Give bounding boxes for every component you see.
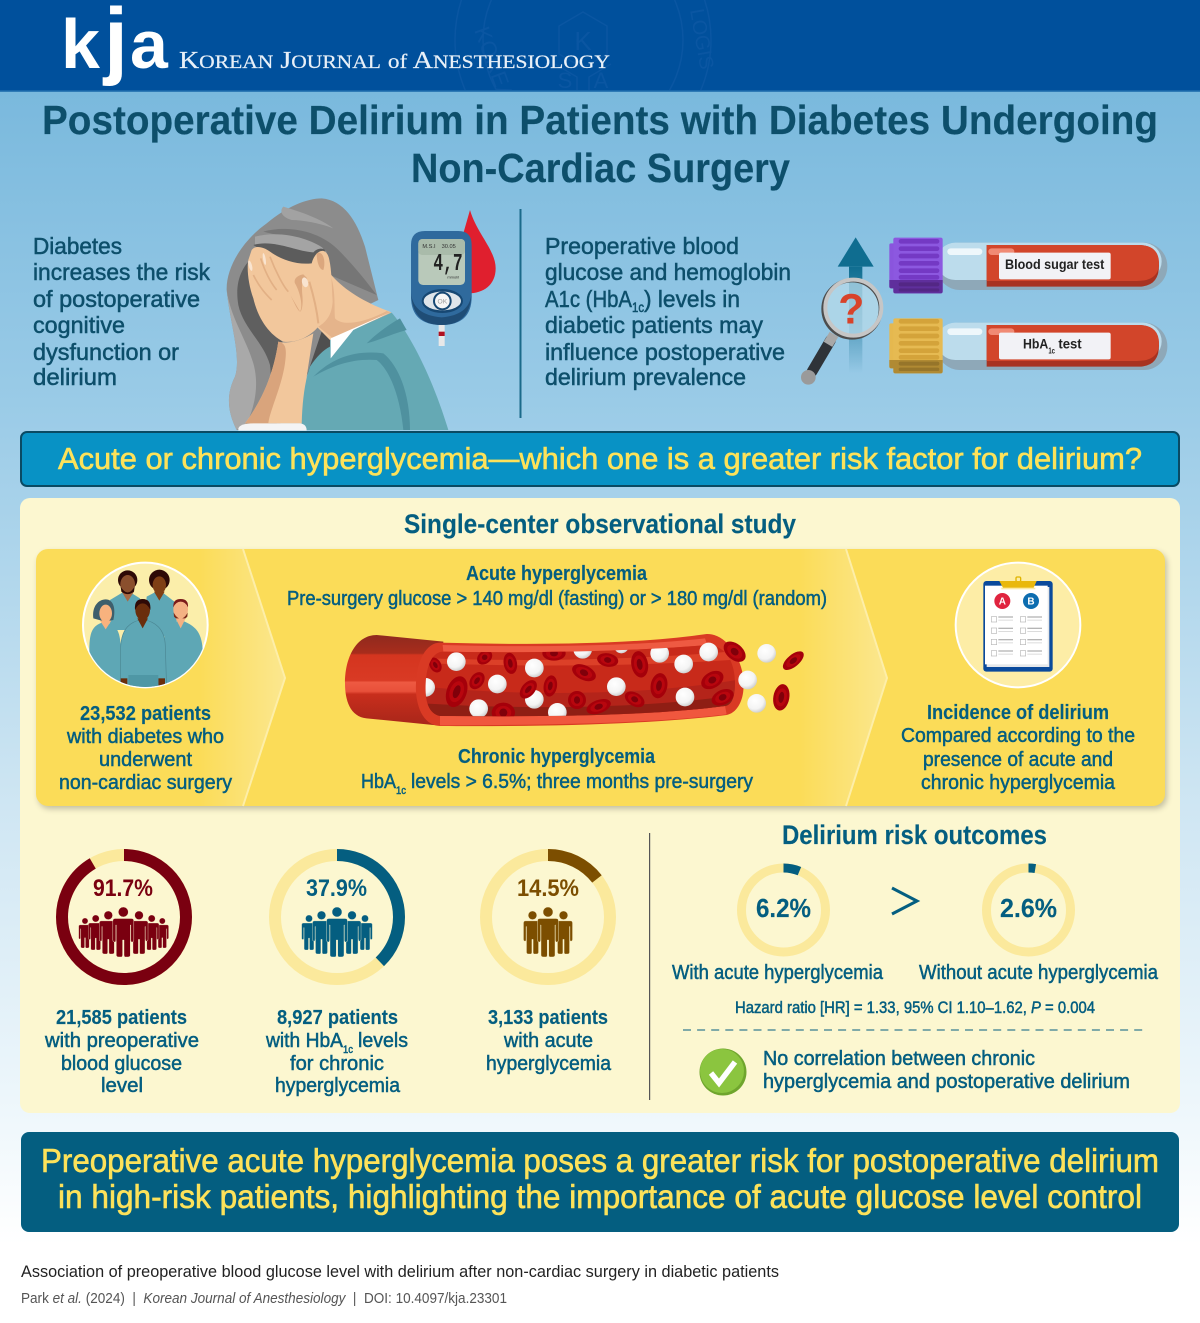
header band: KOREA xyxy=(469,23,519,104)
illustration: glucose meter with blood drop: M.S.I xyxy=(422,244,436,250)
header band: A xyxy=(594,68,609,93)
text: chronic hyperglycemia definition xyxy=(361,746,753,797)
conclusion banner xyxy=(21,1132,1179,1232)
chart: outcome donut 2.6% xyxy=(986,868,1070,952)
text: preoperative glucose: A1c (HbA xyxy=(545,286,633,312)
text: patients enrolled: non-cardiac surgery xyxy=(59,772,232,794)
chart: outcome donut 6.2% xyxy=(742,868,826,952)
illustration: blood sugar test tube xyxy=(889,238,1167,293)
text: diabetes risk: of postoperative xyxy=(33,286,200,312)
text: 21,585 patients: level xyxy=(101,1075,143,1097)
text: preoperative glucose: delirium prevalence xyxy=(545,364,746,390)
illustration: glucose meter with blood drop: 30.05 xyxy=(442,244,456,250)
journal logo: k xyxy=(61,5,100,83)
conclusion banner: in high-risk patients, highlighting the importance of acute glucose level control xyxy=(58,1178,1142,1215)
text: acute hyperglycemia definition xyxy=(287,563,827,610)
text: patients enrolled: 23,532 patients xyxy=(80,703,211,725)
text: diabetes risk: cognitive xyxy=(33,312,125,338)
journal name: KOREAN JOURNAL of ANESTHESIOLOGY xyxy=(179,48,610,74)
text: preoperative glucose: 1c xyxy=(632,299,644,315)
magnifier xyxy=(801,280,881,385)
text: chronic hyperglycemia definition: Chronic hyperglycemia xyxy=(458,746,656,768)
chart: donut 91.7% xyxy=(62,855,186,979)
question banner xyxy=(21,432,1179,486)
text: incidence of delirium: presence of acute and xyxy=(923,749,1113,771)
blood drop xyxy=(463,210,496,293)
chart: donut 37.9% xyxy=(275,855,399,979)
meter body xyxy=(411,231,472,325)
illustration: woman holding her face xyxy=(227,198,448,431)
chart: donut 91.7%: 91.7% xyxy=(93,875,153,902)
panel: study xyxy=(20,498,1180,1113)
text: 3,133 patients: 3,133 patients xyxy=(488,1007,608,1029)
hand and face xyxy=(247,247,333,342)
journal logo: a xyxy=(130,7,169,83)
text: chronic hyperglycemia definition: 1c xyxy=(396,785,406,797)
text: incidence of delirium: Incidence of delirium xyxy=(927,702,1109,724)
icon: patient group xyxy=(83,563,208,690)
tube label: test xyxy=(1058,337,1082,352)
text: patients enrolled: with diabetes who xyxy=(66,726,224,748)
illustration: glucose meter with blood drop: 4,7 xyxy=(433,251,463,278)
text: 8,927 patients: 8,927 patients xyxy=(277,1007,398,1029)
text: patients enrolled: underwent xyxy=(99,749,192,771)
vertical divider xyxy=(520,209,522,418)
text: acute hyperglycemia definition: Pre-surgery glucose > 140 mg/dl (fasting) or > 180 mg/dl (random) xyxy=(287,588,827,610)
illustration: rising arrow and magnifier xyxy=(801,237,881,385)
text: 3,133 patients: hyperglycemia xyxy=(486,1053,612,1075)
chart: donut 37.9%: 37.9% xyxy=(306,875,367,902)
arrow xyxy=(838,237,874,373)
text: 8,927 patients xyxy=(265,1007,408,1097)
text: acute hyperglycemia definition: Acute hyperglycemia xyxy=(466,563,648,585)
text: 21,585 patients: blood glucose xyxy=(61,1053,182,1075)
title: Non-Cardiac Surgery xyxy=(411,145,790,191)
header band: S xyxy=(558,68,572,93)
text: chronic hyperglycemia definition: levels > 6.5%; three months pre-surgery xyxy=(411,771,753,793)
text: 3,133 patients xyxy=(486,1007,612,1075)
illustration: glucose meter with blood drop: mmol/l xyxy=(447,274,459,279)
text: incidence of delirium xyxy=(901,702,1135,794)
vertical divider xyxy=(649,833,650,1100)
chart: donut 14.5%: 14.5% xyxy=(517,875,579,902)
text: no correlation: No correlation between chronic xyxy=(763,1048,1035,1070)
illustration: blood vessel xyxy=(345,634,807,726)
text: preoperative glucose xyxy=(545,233,791,390)
text: incidence of delirium: chronic hyperglycemia xyxy=(921,772,1116,794)
icon: greater than xyxy=(892,888,917,914)
chart: outcome donut 2.6%: 2.6% xyxy=(1000,893,1057,923)
text: incidence of delirium: Compared according to the xyxy=(901,725,1135,747)
text: diabetes risk: delirium xyxy=(33,364,117,390)
text: no correlation xyxy=(763,1048,1130,1093)
text: 21,585 patients: with preoperative xyxy=(44,1030,199,1052)
icon: check mark xyxy=(700,1048,746,1096)
text: patients enrolled xyxy=(59,703,232,794)
tube label: HbA xyxy=(1023,337,1048,352)
illustration: HbA1c test tube xyxy=(889,318,1167,373)
study heading: Single-center observational study xyxy=(404,509,796,539)
text: 8,927 patients: hyperglycemia xyxy=(275,1075,401,1097)
icon: three people xyxy=(523,907,573,957)
icon: clipboard questionnaire: B xyxy=(1027,597,1035,608)
text: 8,927 patients: levels xyxy=(358,1030,408,1052)
tube label: 1c xyxy=(1048,347,1055,356)
icon: five people xyxy=(302,907,372,957)
header band: K xyxy=(574,26,592,56)
text: preoperative glucose: glucose and hemoglobin xyxy=(545,259,791,285)
conclusion banner: Preoperative acute hyperglycemia poses a greater risk for postoperative delirium xyxy=(41,1142,1159,1179)
title: Postoperative Delirium in Patients with Diabetes Undergoing xyxy=(42,97,1158,143)
text: 8,927 patients: with HbA xyxy=(265,1030,344,1052)
tube label xyxy=(999,253,1111,279)
tube label xyxy=(999,333,1111,359)
text: no correlation: hyperglycemia and postoperative delirium xyxy=(763,1071,1130,1093)
label: without acute hyperglycemia: Without acute hyperglycemia xyxy=(919,962,1159,984)
text: preoperative glucose: influence postoperative xyxy=(545,339,785,365)
outcomes heading: Delirium risk outcomes xyxy=(782,820,1047,850)
text: preoperative glucose: Preoperative blood xyxy=(545,233,739,259)
header band xyxy=(0,0,1200,92)
text: diabetes risk xyxy=(33,233,210,390)
tube label: Blood sugar test xyxy=(1005,257,1105,272)
panel: study design band xyxy=(36,549,1165,806)
illustration: glucose meter with blood drop xyxy=(411,210,496,346)
title xyxy=(42,97,1158,191)
citation: source: Park et al. (2024) | Korean Journal of Anesthesiology | DOI: 10.4097/kja.23301 xyxy=(21,1290,507,1307)
header band: LOGIS xyxy=(685,7,717,71)
illustration: glucose meter with blood drop: OK xyxy=(438,298,448,305)
text: 3,133 patients: with acute xyxy=(503,1030,593,1052)
magnifier: ? xyxy=(838,286,864,334)
text: 21,585 patients xyxy=(44,1007,199,1097)
citation: article title: Association of preoperative blood glucose level with delirium after non-cardiac surgery in diabetic patients xyxy=(21,1262,779,1281)
label: with acute hyperglycemia: With acute hyperglycemia xyxy=(672,962,884,984)
text: preoperative glucose: diabetic patients may xyxy=(545,312,763,338)
text: 21,585 patients: 21,585 patients xyxy=(56,1007,187,1029)
text: hazard ratio: Hazard ratio [HR] = 1.33, 95% CI 1.10–1.62, P = 0.004 xyxy=(735,998,1095,1017)
chart: outcome donut 6.2%: 6.2% xyxy=(756,893,811,923)
text: chronic hyperglycemia definition: HbA xyxy=(361,771,397,793)
text: preoperative glucose: ) levels in xyxy=(644,286,740,312)
text: diabetes risk: Diabetes xyxy=(33,233,122,259)
question banner: Acute or chronic hyperglycemia—which one is a greater risk factor for delirium? xyxy=(58,441,1142,476)
journal logo xyxy=(61,0,610,87)
icon: seven people xyxy=(79,907,169,957)
text: 8,927 patients: 1c xyxy=(343,1044,353,1056)
text: diabetes risk: dysfunction or xyxy=(33,339,179,365)
text: diabetes risk: increases the risk xyxy=(33,259,210,285)
icon: clipboard questionnaire: A xyxy=(999,597,1006,608)
chart: donut 14.5% xyxy=(486,855,610,979)
text: 8,927 patients: for chronic xyxy=(290,1053,384,1075)
icon: clipboard questionnaire xyxy=(956,563,1080,687)
